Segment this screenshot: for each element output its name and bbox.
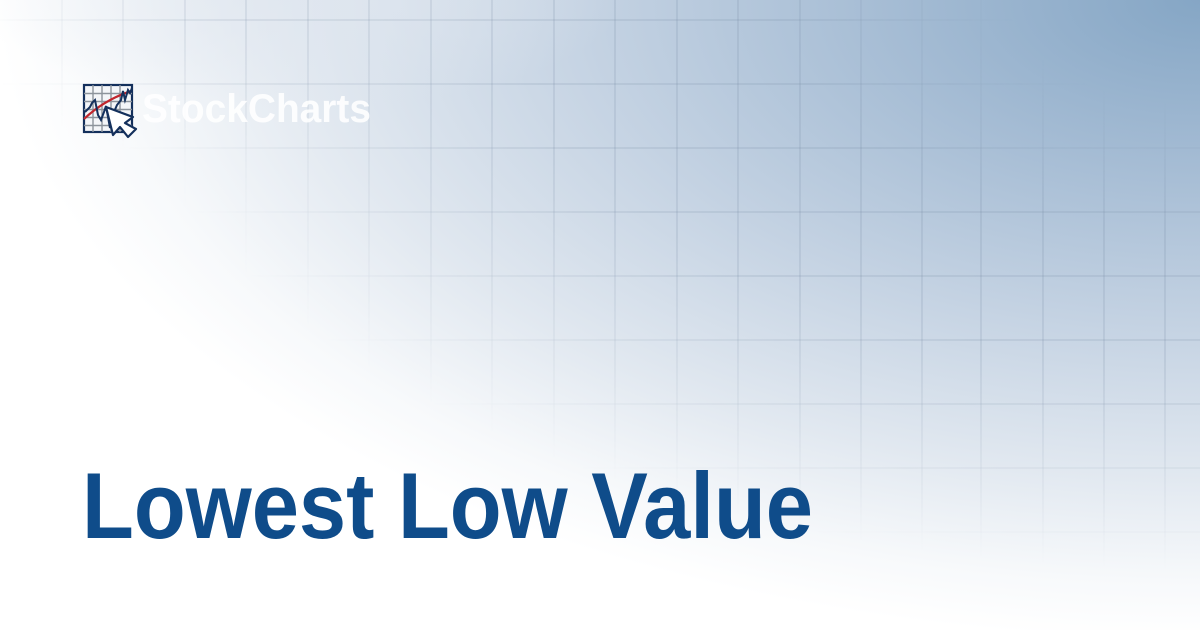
logo wordmark: StockCharts bbox=[142, 87, 371, 131]
title: Lowest Low Value bbox=[82, 453, 813, 558]
icon: chart with cursor bbox=[84, 85, 136, 137]
logo: StockCharts bbox=[84, 85, 371, 137]
